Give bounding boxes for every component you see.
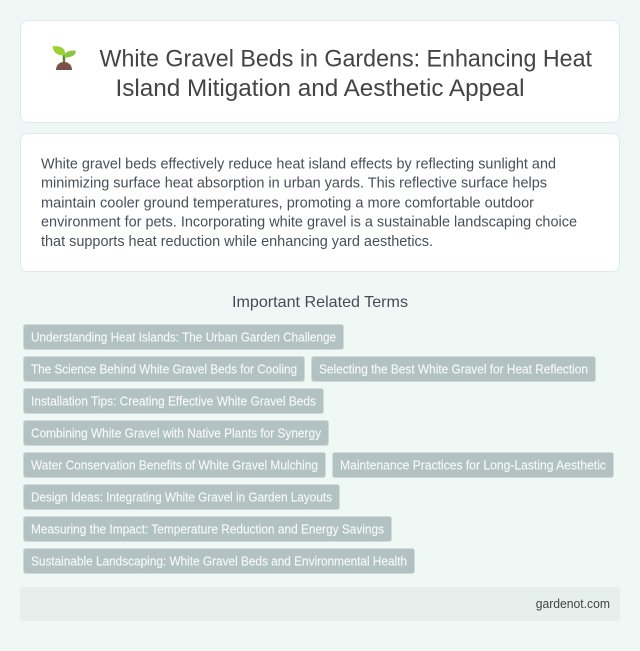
tag: selecting gravel: Selecting the Best White Gravel for Heat Reflection bbox=[319, 362, 588, 376]
title text: Island Mitigation and Aesthetic Appeal bbox=[116, 75, 524, 102]
tag: sustainable landscaping bbox=[24, 548, 414, 574]
title text bbox=[100, 46, 592, 102]
footer bar bbox=[20, 587, 620, 621]
panel: description card bbox=[20, 134, 620, 272]
tag: native plants: Combining White Gravel with Native Plants for Synergy bbox=[31, 426, 321, 440]
description text: environment for pets. Incorporating white gravel is a sustainable landscaping choice bbox=[41, 214, 577, 231]
tag: measuring impact: Measuring the Impact: Temperature Reduction and Energy Savings bbox=[31, 522, 384, 536]
icon: seedling bbox=[52, 46, 76, 70]
panel: title card bbox=[20, 20, 620, 122]
tag: installation tips bbox=[24, 388, 324, 414]
tag: selecting gravel bbox=[312, 356, 596, 382]
tag: design ideas: Design Ideas: Integrating White Gravel in Garden Layouts bbox=[31, 490, 332, 504]
tag: water conservation: Water Conservation Benefits of White Gravel Mulching bbox=[31, 458, 318, 472]
tag: science behind gravel bbox=[24, 356, 304, 382]
tag: sustainable landscaping: Sustainable Landscaping: White Gravel Beds and Environmental Health bbox=[31, 554, 407, 568]
tag: science behind gravel: The Science Behind White Gravel Beds for Cooling bbox=[31, 362, 297, 376]
tag: measuring impact bbox=[24, 516, 392, 542]
tag: understanding heat islands bbox=[24, 324, 344, 350]
tag: design ideas bbox=[24, 484, 340, 510]
description text: White gravel beds effectively reduce heat island effects by reflecting sunlight and bbox=[41, 155, 556, 172]
tag: maintenance practices: Maintenance Practices for Long-Lasting Aesthetic bbox=[340, 458, 606, 472]
tag: installation tips: Installation Tips: Creating Effective White Gravel Beds bbox=[31, 394, 316, 408]
tag: understanding heat islands: Understanding Heat Islands: The Urban Garden Challenge bbox=[31, 330, 336, 344]
title text: White Gravel Beds in Gardens: Enhancing Heat bbox=[100, 46, 592, 73]
description text: minimizing surface heat absorption in urban yards. This reflective surface helps bbox=[41, 175, 547, 192]
description text bbox=[41, 155, 577, 250]
tag: water conservation bbox=[24, 452, 326, 478]
description text: maintain cooler ground temperatures, promoting a more comfortable outdoor bbox=[41, 194, 534, 211]
description text: that supports heat reduction while enhancing yard aesthetics. bbox=[41, 233, 433, 250]
footer text: gardenot.com bbox=[536, 597, 610, 611]
heading: important related terms: Important Related Terms bbox=[232, 294, 408, 311]
tag: native plants bbox=[24, 420, 328, 446]
tag: maintenance practices bbox=[332, 452, 614, 478]
